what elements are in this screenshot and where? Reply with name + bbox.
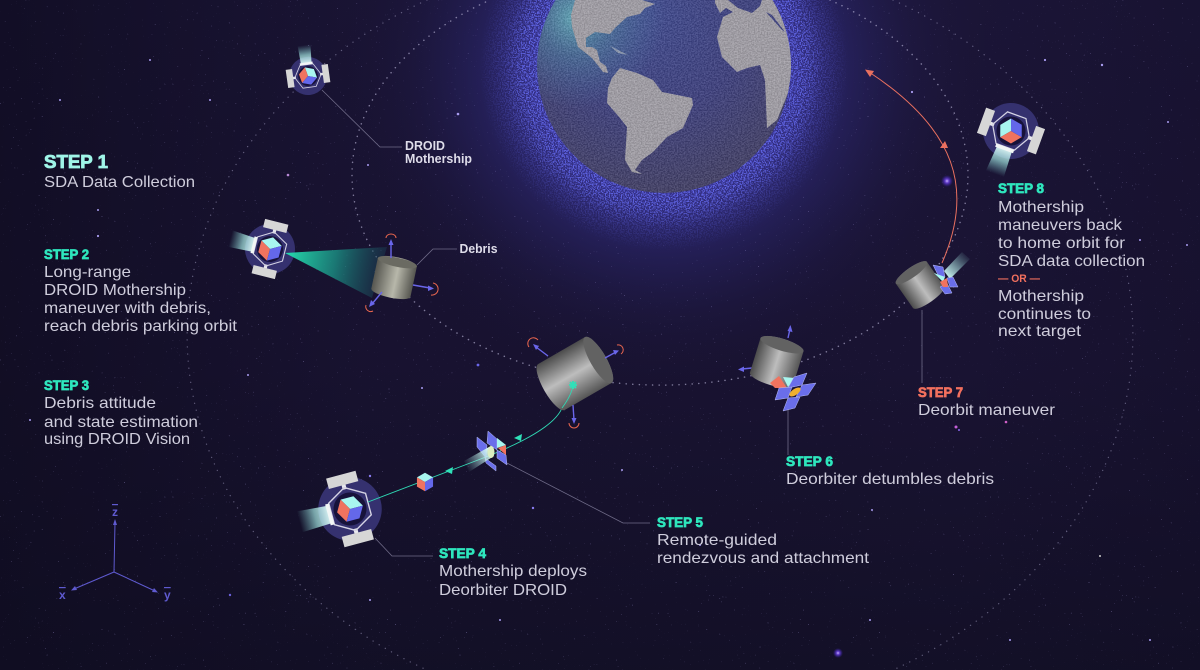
bright star — [833, 648, 843, 658]
axis labels: x — [59, 588, 66, 602]
description: step 1: SDA Data Collection — [44, 174, 195, 191]
or separator: — OR — — [998, 273, 1040, 285]
text: step 3 — [44, 378, 198, 448]
icon: debris cylinder — [893, 258, 947, 312]
bright star — [941, 175, 953, 187]
icon: large debris cylinder — [531, 333, 618, 414]
panel: step 2 and 3 debris scan — [223, 212, 498, 312]
icon: DROID Mothership satellite — [283, 42, 332, 98]
icon: returning Mothership — [966, 94, 1050, 185]
icon: Deorbiter attached — [770, 373, 816, 411]
text: step 8 — [998, 181, 1145, 340]
leader line: DROID Mothership — [322, 90, 402, 147]
description: step 5: Remote-guided — [657, 532, 777, 549]
axis labels: y — [164, 588, 171, 602]
description: step 8 second option: next target — [998, 323, 1082, 340]
inner orbit — [352, 0, 968, 385]
Earth globe — [537, 0, 795, 193]
South America — [607, 68, 693, 174]
description: step 2: DROID Mothership — [44, 282, 186, 299]
red return trajectory arrow — [865, 70, 957, 263]
description: step 4 — [439, 563, 587, 599]
rotation arrows — [738, 325, 792, 372]
panel: step 7 deorbit — [893, 252, 970, 383]
arrowheads on trajectory — [445, 434, 522, 474]
leader line: step 4 — [375, 538, 433, 556]
leader line: step 5 — [507, 463, 650, 523]
leader line: step 7 — [921, 310, 923, 383]
icon: debris cylinder — [748, 332, 805, 391]
description: step 4: Deorbiter DROID — [439, 582, 567, 599]
description: step 2: maneuver with debris, — [44, 300, 211, 317]
icon: Deorbiter attached — [933, 252, 970, 294]
Red Sea — [766, 12, 785, 32]
label: DROID Mothership — [405, 138, 472, 166]
description: step 2: reach debris parking orbit — [44, 318, 238, 335]
outer orbit — [187, 0, 1133, 670]
icon: Mothership deploying — [291, 466, 390, 557]
debris cloud around Earth — [484, 0, 844, 246]
surface grain — [537, 0, 791, 193]
heading: step 2: STEP 2 — [44, 247, 89, 262]
description: step 5 — [657, 532, 870, 567]
text: step 1 — [44, 152, 195, 191]
panel: step 4 and 5 deploy and rendezvous — [291, 333, 650, 557]
heading: step 4: STEP 4 — [439, 546, 486, 561]
rotation arrows on large debris — [528, 338, 623, 428]
heading: step 6: STEP 6 — [786, 454, 833, 469]
heading: step 1: STEP 1 — [44, 152, 108, 172]
axis labels — [59, 505, 171, 602]
description: step 8 second option — [998, 288, 1091, 340]
description: step 8 first option: SDA data collection — [998, 253, 1145, 270]
axis labels: z — [112, 505, 118, 519]
vision cone — [285, 247, 387, 298]
text: step 4 — [439, 546, 587, 599]
panel: step 1 satellite — [283, 42, 472, 166]
description: step 8 first option: maneuvers back — [998, 217, 1123, 234]
heading: step 7: STEP 7 — [918, 385, 963, 400]
description: step 3: and state estimation — [44, 414, 198, 431]
description: step 8 first option: to home orbit for — [998, 235, 1126, 252]
description: step 8 second option: Mothership — [998, 288, 1084, 305]
text: step 6 — [786, 454, 994, 488]
description: step 8 first option — [998, 199, 1145, 270]
Mediterranean sea — [728, 0, 762, 13]
rotation arrows on debris — [366, 234, 438, 312]
trajectory of Deorbiter — [368, 408, 562, 502]
description: step 7: Deorbit maneuver — [918, 402, 1056, 419]
leader line: debris — [417, 249, 457, 265]
heading: step 5: STEP 5 — [657, 515, 703, 530]
text: step 2 — [44, 247, 238, 335]
trajectory end on debris — [562, 385, 573, 408]
icon: debris cylinder — [370, 253, 418, 302]
label: DROID Mothership: Mothership — [405, 151, 472, 166]
label: debris: Debris — [460, 241, 498, 256]
text: step 5 — [657, 515, 870, 567]
Africa and Europe — [715, 0, 795, 128]
coordinate axes — [59, 505, 171, 602]
icon: Deorbiter cube — [417, 473, 433, 491]
description: step 5: rendezvous and attachment — [657, 550, 870, 567]
description: step 3: Debris attitude — [44, 395, 156, 412]
description: step 8 first option: Mothership — [998, 199, 1084, 216]
icon: Deorbiter approaching — [464, 431, 507, 472]
description: step 2: Long-range — [44, 264, 131, 281]
icon: scanning Mothership — [223, 212, 301, 282]
leader line: step 6 — [787, 409, 789, 455]
label: DROID Mothership: DROID — [405, 138, 445, 153]
North America — [571, 0, 655, 73]
description: step 3 — [44, 395, 198, 448]
description: step 3: using DROID Vision — [44, 431, 190, 448]
panel: step 6 detumble — [738, 325, 816, 455]
text: step 7 — [918, 385, 1056, 419]
Caribbean islands — [610, 46, 628, 55]
description: step 4: Mothership deploys — [439, 563, 587, 580]
heading: step 3: STEP 3 — [44, 378, 89, 393]
description: step 2 — [44, 264, 238, 335]
heading: step 8: STEP 8 — [998, 181, 1044, 196]
description: step 8 second option: continues to — [998, 306, 1091, 323]
docking target marker — [569, 381, 577, 389]
description: step 6: Deorbiter detumbles debris — [786, 471, 994, 488]
